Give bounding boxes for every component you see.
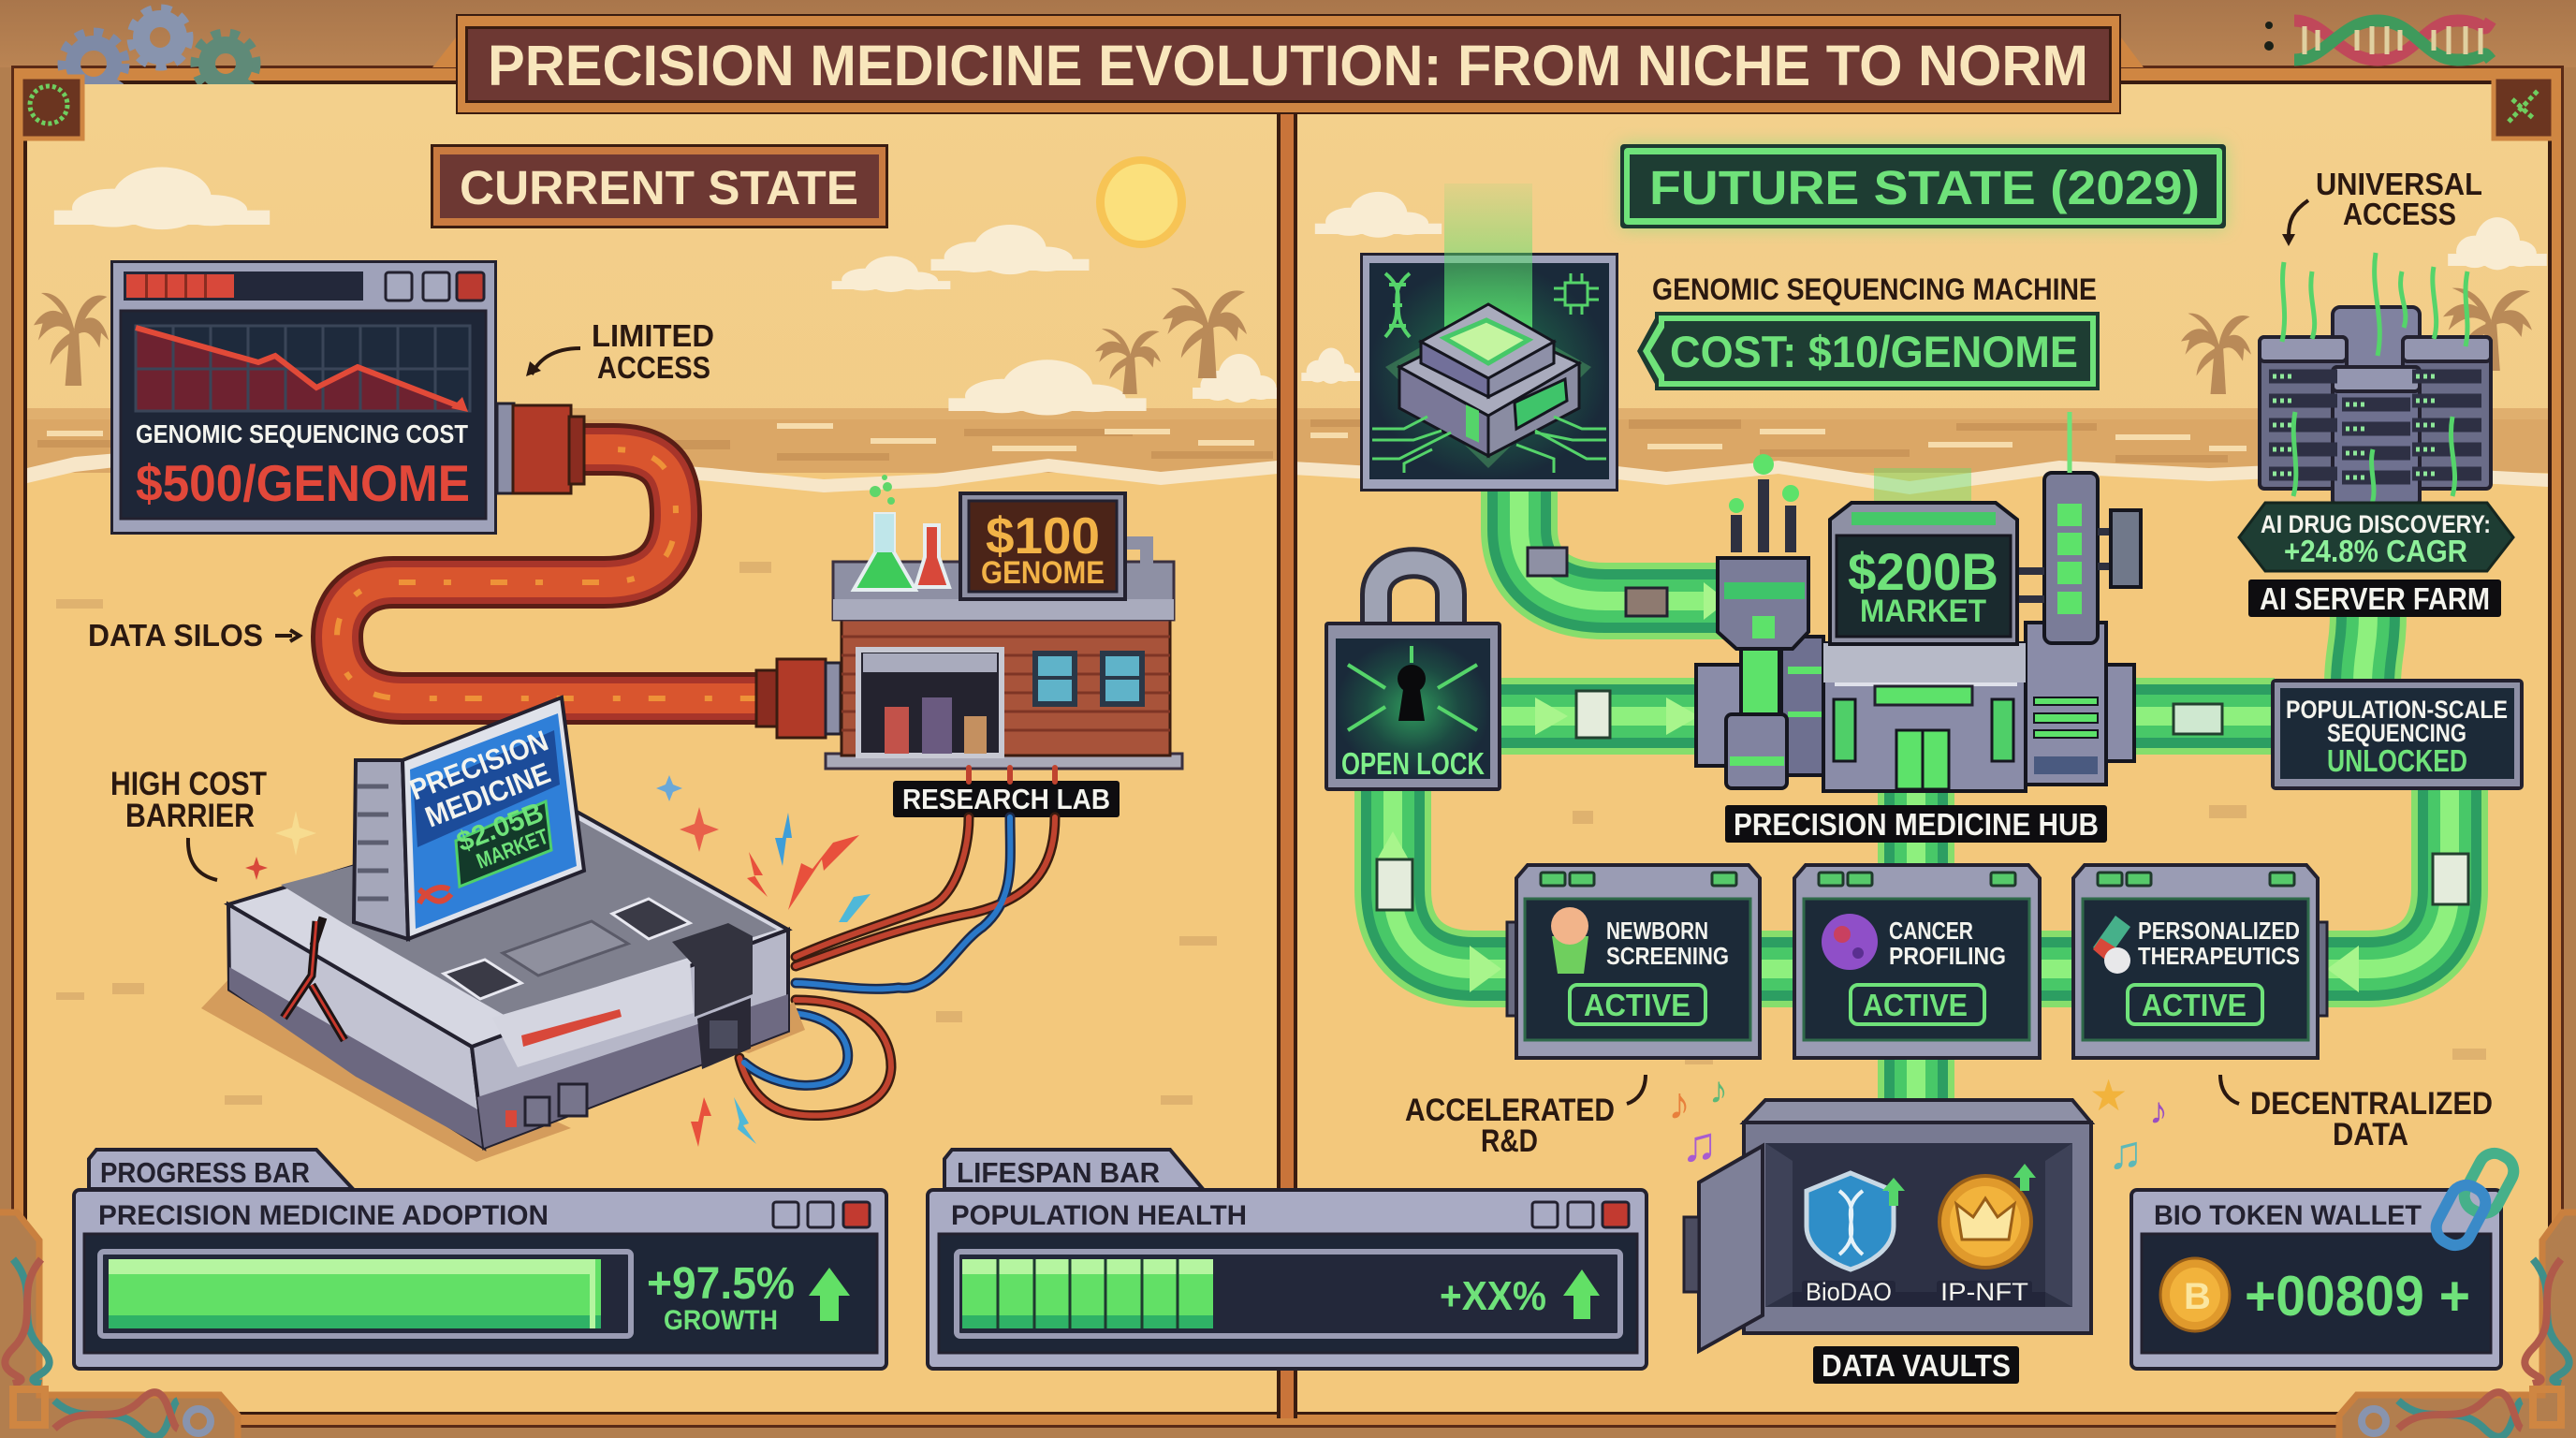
panel: bio token wallet: +00809 + [2245,1265,2470,1328]
monitor: $200B market: $200B [1848,542,1998,601]
label: precision medicine hub: PRECISION MEDICINE HUB [1734,807,2099,842]
window: precision medicine adoption progress bar [74,1150,886,1369]
card: newborn screening: SCREENING [1606,942,1729,970]
card: cancer profiling: CANCER [1889,917,1973,945]
label: high cost barrier: HIGH COST [110,766,267,802]
music notes and star [1668,1070,2168,1179]
console light front plate [492,960,694,1067]
data vault: BioDAO [1806,1278,1892,1306]
progress fill [109,1259,601,1328]
panel: population-scale sequencing unlocked: UNLOCKED [2327,743,2467,778]
label: universal access: ACCESS [2343,197,2456,231]
bottom corner DNA decorations [5,1259,2569,1437]
icon: cancer cell [1822,914,1878,970]
tab: progress bar: PROGRESS BAR [100,1156,310,1189]
music notes and star: ♪ [1668,1079,1690,1129]
label: research lab: RESEARCH LAB [902,783,1110,815]
AI server farm racks [2260,253,2491,505]
label: decentralized data: DATA [2333,1117,2408,1152]
label: high cost barrier [110,766,267,880]
label: accelerated R&D [1405,1075,1646,1159]
sparkles and sparks [245,775,871,1147]
callout: AI drug discovery CAGR [2239,503,2513,571]
lower corner frame notches [0,1212,2576,1438]
tangled cables [739,768,1055,1116]
window: precision medicine adoption progress bar: GROWTH [664,1305,778,1336]
panel: population-scale sequencing unlocked [2271,679,2524,790]
console buttons [444,960,521,999]
music notes and star: ★ [2089,1071,2128,1120]
sign: $100 genome: GENOME [981,555,1105,591]
line chart: falling cost [136,326,470,412]
data vault [1684,1100,2091,1351]
data vault: IP-NFT [1940,1278,2028,1306]
label: limited access: ACCESS [597,350,710,385]
heading: current state: CURRENT STATE [460,161,858,214]
label: decentralized data: DECENTRALIZED [2250,1086,2493,1122]
music notes and star: ♪ [1709,1070,1728,1111]
right tower [2017,412,2141,643]
icon: baby [1551,907,1588,974]
chip icon [1565,283,1588,305]
label: accelerated R&D: R&D [1481,1123,1538,1159]
label: universal access [2282,167,2482,246]
game cartridge: precision medicine $2.05B: MEDICINE [420,756,555,834]
open padlock [1325,563,1501,791]
label: AI server farm: AI SERVER FARM [2260,581,2490,616]
data packets on pipes [1377,548,2468,910]
label: limited access [526,318,714,385]
panel: genomic sequencing cost monitor [110,260,497,535]
card: personalized therapeutics: ACTIVE [2142,988,2247,1022]
panel: population-scale sequencing unlocked: SEQUENCING [2327,719,2466,747]
card: personalized therapeutics [2073,865,2327,1058]
tab: lifespan bar: LIFESPAN BAR [957,1156,1160,1189]
research lab building [826,475,1182,769]
heading: future state 2029 [1620,144,2226,228]
card: newborn screening: NEWBORN [1606,917,1708,945]
corner emblems [21,77,2554,139]
icon: bitcoin coin: B [2184,1276,2211,1317]
isometric sequencer [1385,304,1591,468]
console crack [284,917,344,1040]
card: personalized therapeutics: THERAPEUTICS [2138,942,2300,970]
hub doors and green panels [1788,667,2098,789]
label: decentralized data [2220,1075,2493,1152]
game cartridge: precision medicine $2.05B: MARKET [473,824,551,873]
sign: $100 genome [960,493,1125,599]
panel: bio token wallet: BIO TOKEN WALLET [2154,1200,2422,1231]
card: personalized therapeutics: PERSONALIZED [2138,917,2300,945]
tab: lifespan bar [944,1150,1203,1189]
callout: cost $10 per genome: COST: $10/GENOME [1670,327,2078,376]
pipe connector bottom [756,659,841,738]
DNA helix decoration top right [2264,21,2491,60]
window: precision medicine adoption progress bar: PRECISION MEDICINE ADOPTION [98,1200,549,1231]
gears decoration [62,8,256,95]
game cartridge: precision medicine $2.05B [354,697,584,939]
music notes and star: ♫ [2108,1126,2144,1179]
callout: AI drug discovery CAGR: AI DRUG DISCOVERY: [2261,510,2491,538]
music notes and star: ♪ [2149,1091,2168,1132]
left reactor tower [1718,454,1808,788]
vault door [1699,1146,1763,1351]
label: data silos: DATA SILOS [88,618,263,653]
precision medicine hub building [1696,412,2141,791]
icon: BioDAO shield [1807,1173,1894,1269]
panel: genomic sequencing cost monitor: $500/GENOME [136,454,470,512]
title banner [432,14,2144,114]
title text: PRECISION MEDICINE EVOLUTION: FROM NICHE TO NORM [488,34,2088,97]
label: accelerated R&D: ACCELERATED [1405,1093,1615,1128]
monitor: $200B market: MARKET [1860,594,1986,629]
card: cancer profiling: ACTIVE [1863,988,1968,1022]
callout: cost $10 per genome [1637,312,2100,390]
panel: population-scale sequencing unlocked: POPULATION-SCALE [2286,696,2508,724]
centre divider [1277,112,1297,1418]
heading: future state 2029: FUTURE STATE (2029) [1649,161,2200,214]
pipe connector top [497,404,584,493]
label: universal access: UNIVERSAL [2316,167,2482,201]
heading: current state [431,144,888,228]
icon: flasks [854,475,949,590]
icon: chain link [2431,1148,2519,1251]
label: limited access: LIMITED [592,318,714,353]
music notes and star: ♫ [1681,1118,1718,1172]
panel: bio token wallet [2131,1148,2519,1369]
segmented health fill [962,1259,1213,1328]
window: population health lifespan bar [928,1150,1647,1369]
window: population health lifespan bar: +XX% [1440,1273,1546,1319]
green data pipes [1376,492,2468,1105]
icon: bitcoin coin [2160,1258,2230,1331]
game console [201,803,805,1162]
circuit traces [1372,417,1606,473]
game cartridge: precision medicine $2.05B: PRECISION [405,724,552,807]
label: high cost barrier: BARRIER [125,798,255,834]
panel: genomic sequencing machine [1360,183,1618,492]
card: cancer profiling [1794,865,2040,1058]
card: newborn screening: ACTIVE [1584,988,1690,1022]
label: data vaults: DATA VAULTS [1822,1348,2011,1383]
label: genomic sequencing machine: GENOMIC SEQUENCING MACHINE [1652,272,2097,306]
card: newborn screening [1507,865,1760,1058]
callout: AI drug discovery CAGR: +24.8% CAGR [2284,534,2467,568]
card: cancer profiling: PROFILING [1889,942,2006,970]
window: precision medicine adoption progress bar: +97.5% [647,1259,795,1309]
monitor: $200B market [1830,468,2017,644]
icon: IP-NFT coin [1939,1176,2031,1268]
red data pipe [337,449,777,698]
open padlock: OPEN LOCK [1341,746,1485,781]
icon: pills [2093,916,2130,974]
dna icon [1385,273,1410,337]
sign: $100 genome: $100 [986,506,1100,565]
panel: genomic sequencing cost monitor: GENOMIC SEQUENCING COST [136,419,468,448]
game cartridge: precision medicine $2.05B: $2.05B [453,797,548,858]
sun [1096,156,1186,248]
window: population health lifespan bar: POPULATION HEALTH [951,1200,1247,1231]
